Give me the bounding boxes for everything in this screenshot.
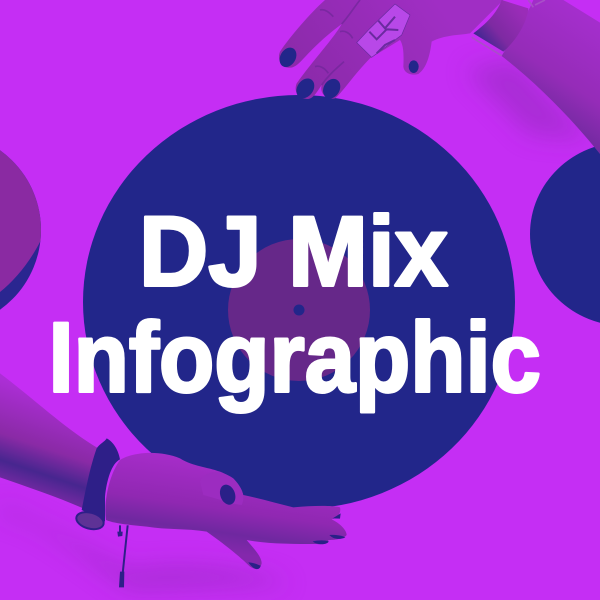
bottom left hand — [0, 373, 347, 587]
vinyl record — [83, 95, 515, 509]
title line two: Infographic — [48, 302, 541, 412]
ring — [357, 4, 410, 57]
hand and fingers — [279, 0, 503, 99]
thumb — [200, 472, 243, 505]
nail two — [293, 75, 318, 102]
record disc — [83, 95, 515, 509]
nail three — [320, 76, 344, 102]
record body — [0, 132, 41, 328]
record label — [228, 239, 370, 381]
bracelet — [82, 438, 120, 522]
string ends — [117, 532, 124, 587]
palm and fingers — [105, 453, 347, 569]
bracelet bead — [74, 509, 106, 532]
spindle hole — [294, 304, 304, 316]
ring chevrons — [369, 17, 398, 53]
right partial record — [530, 142, 600, 326]
bracelet strings — [120, 525, 128, 580]
finger creases — [315, 0, 360, 85]
title line one: DJ Mix — [139, 196, 448, 306]
finger nails — [248, 513, 345, 569]
nail one — [276, 45, 300, 70]
thumb nail — [217, 482, 238, 507]
title — [48, 196, 541, 412]
thumb nail — [409, 60, 419, 73]
wrist band — [473, 0, 528, 52]
band strap — [472, 0, 545, 56]
record sheen — [0, 150, 41, 292]
top right hand — [276, 0, 600, 154]
left partial record — [0, 150, 41, 310]
forearm — [502, 0, 600, 154]
forearm — [0, 373, 98, 508]
